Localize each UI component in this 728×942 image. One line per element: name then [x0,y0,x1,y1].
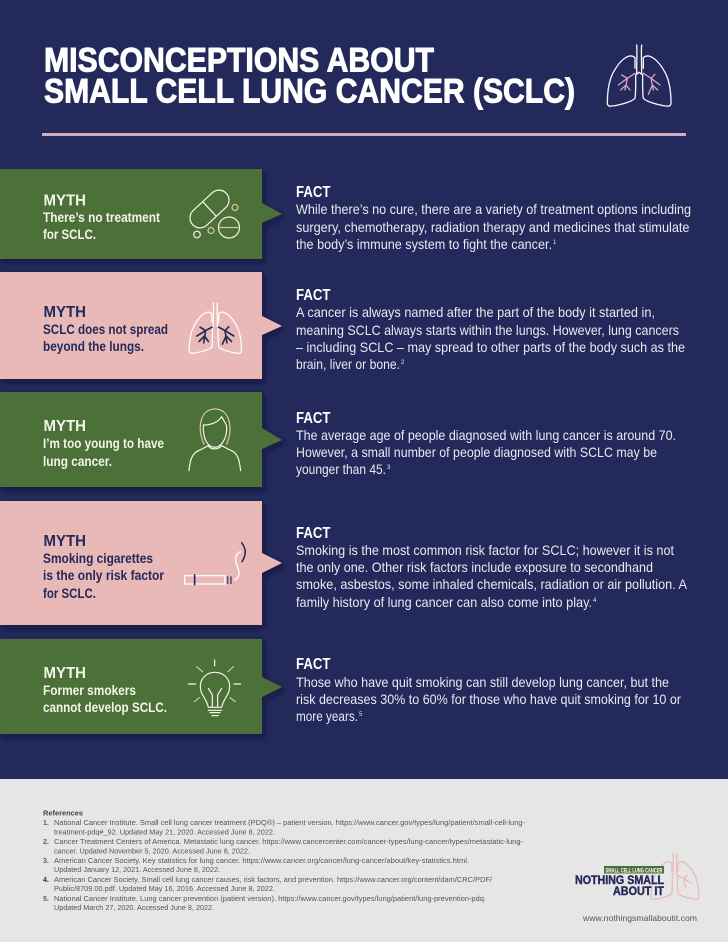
title: SMALL CELL LUNG CANCER (SCLC) [44,72,575,110]
fact 2 [296,287,685,372]
fact heading: FACT [296,184,331,201]
fact text: The average age of people diagnosed with lung cancer is around 70. [296,427,676,443]
fact text: more years. [296,708,358,724]
fact text [296,542,688,610]
fact text: the only one. Other risk factors include exposure to secondhand [296,559,653,575]
reference list: cancer. Updated November 5, 2020. Accessed June 8, 2022. [54,848,250,856]
fact text: – including SCLC – may spread to other parts of the body such as the [296,339,685,355]
icon: cigarette [185,543,245,585]
myth text: beyond the lungs. [43,339,144,354]
fact text: family history of lung cancer can also come into play. [296,594,592,610]
panel shape [0,272,282,379]
reference list: American Cancer Society. Small cell lung cancer causes, risk factors, and prevention. https://www.cancer.org/content/dam/CRC/PDF/ [54,877,492,884]
footnote mark: 5 [359,712,363,718]
fact heading: FACT [296,656,331,673]
reference list: treatment-pdq#_92. Updated May 21, 2020. Accessed June 8, 2022. [54,830,275,836]
fact 5 [296,656,681,724]
myth heading: MYTH [44,418,86,435]
fact text: meaning SCLC always starts within the lungs. However, lung cancers [296,322,679,338]
reference numbers: 3. [43,858,49,865]
fact text [296,304,685,372]
myth text [43,683,167,715]
reference numbers: 2. [43,839,49,846]
logo wordmark [575,873,664,898]
reference list: National Cancer Institute. Lung cancer prevention (patient version). https://www.cancer.gov/types/lung/patient/lung-prevention-pdq. [54,896,486,903]
reference list [54,819,526,912]
fact text: smoke, asbestos, some inhaled chemicals, radiation or air pollution. A [296,576,688,592]
myth panel 4 [0,501,282,625]
fact text [296,427,676,477]
myth text [43,436,164,469]
icon: person [189,409,241,471]
title [44,42,575,110]
row 3 [0,392,676,487]
myth panel 3 [0,392,282,487]
myth text: Former smokers [43,683,136,698]
fact heading: FACT [296,525,331,542]
reference numbers: 5. [43,896,49,903]
icon: lungs header [607,45,671,106]
footnote mark: 1 [553,240,557,246]
references background [0,779,728,942]
fact heading: FACT [296,410,331,427]
footnote mark: 4 [593,598,597,604]
reference list: National Cancer Institute. Small cell lung cancer treatment (PDQ®) – patient version. https://www.cancer.gov/types/lung/patient/small-cell-lung- [54,819,526,827]
fact text: Smoking is the most common risk factor for SCLC; however it is not [296,542,674,558]
references heading: References [43,808,83,818]
footnote mark: 2 [401,360,405,366]
row 2 [0,272,685,379]
panel shape [0,639,282,734]
title: MISCONCEPTIONS ABOUT [44,42,434,80]
logo wordmark: ABOUT IT [613,884,664,898]
footnote mark: 3 [387,465,391,471]
fact text: While there’s no cure, there are a variety of treatment options including [296,201,691,217]
fact text: Those who have quit smoking can still develop lung cancer, but the [296,674,669,690]
fact 4 [296,525,688,610]
website: www.nothingsmallaboutit.com [582,913,697,923]
divider rule [42,133,686,136]
reference list: Updated January 12, 2021. Accessed June 8, 2022. [54,867,220,874]
fact text: the body’s immune system to fight the cancer. [296,236,552,252]
logo [575,854,699,923]
myth heading: MYTH [44,304,86,321]
fact text: younger than 45. [296,461,386,477]
fact text [296,674,681,724]
reference list: Cancer Treatment Centers of America. Metastatic lung cancer. https://www.cancercenter.com/cancer-types/lung-cancer/types/metastatic-lung- [54,839,524,846]
reference numbers: 1. [43,820,49,827]
myth text: is the only risk factor [43,568,165,583]
myth text: for SCLC. [43,227,96,242]
reference numbers: 4. [43,877,49,884]
logo wordmark: NOTHING SMALL [575,873,664,887]
reference list: Updated March 27, 2020. Accessed June 8, 2022. [54,905,214,912]
reference numbers [43,820,49,903]
fact text: A cancer is always named after the part of the body it started in, [296,304,655,320]
myth panel 2 [0,272,282,379]
myth text: I’m too young to have [43,436,164,451]
panel shape [0,392,282,487]
myth text [43,210,160,242]
fact 1 [296,184,691,252]
myth text: for SCLC. [43,586,96,601]
fact text: risk decreases 30% to 60% for those who have quit smoking for 10 or [296,691,681,707]
myth heading: MYTH [44,665,86,682]
fact text: However, a small number of people diagnosed with SCLC may be [296,444,657,460]
row 4 [0,501,688,625]
myth heading: MYTH [44,192,86,210]
row 5 [0,639,681,734]
myth text: There’s no treatment [43,210,160,225]
myth panel 1 [0,169,282,259]
icon: pills [186,186,240,238]
myth text: lung cancer. [43,454,112,469]
fact 3 [296,410,676,477]
myth text: SCLC does not spread [43,322,168,337]
row 1 [0,169,691,259]
references [43,808,526,912]
myth text: Smoking cigarettes [43,551,153,566]
myth panel 5 [0,639,282,734]
fact text: brain, liver or bone. [296,356,400,372]
logo tag text: SMALL CELL LUNG CANCER [606,868,663,874]
myth heading: MYTH [44,533,86,550]
logo tag [604,866,664,874]
fact text [296,201,691,252]
icon: lungs [189,303,241,353]
reference list: American Cancer Society. Key statistics for lung cancer. https://www.cancer.org/cancer/lung-cancer/about/key-statistics.html. [54,858,469,865]
icon: light bulb [188,660,241,716]
logo lungs [651,854,699,899]
fact heading: FACT [296,287,331,304]
myth text [43,322,168,354]
myth text: cannot develop SCLC. [43,700,167,715]
myth text [43,551,165,601]
panel shape [0,501,282,625]
panel shape [0,169,282,259]
reference list: Public/8709.00.pdf. Updated May 16, 2016. Accessed June 8, 2022. [54,886,275,893]
fact text: surgery, chemotherapy, radiation therapy and medicines that stimulate [296,219,690,235]
